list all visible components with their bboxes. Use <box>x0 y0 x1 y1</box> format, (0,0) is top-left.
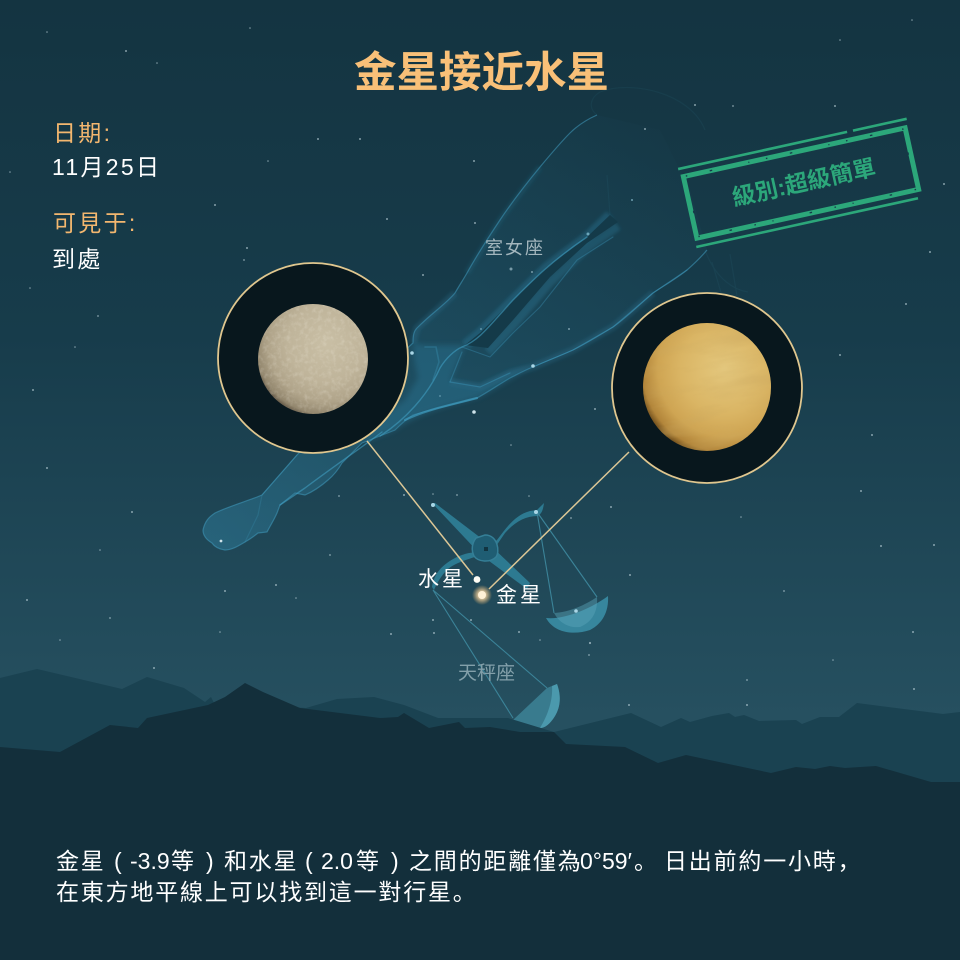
constellation: Libra <box>431 503 608 728</box>
difficulty stamp <box>678 119 924 247</box>
planet point: Venus <box>472 585 492 605</box>
constellation: Virgo <box>203 88 748 550</box>
date value: 11月25日 <box>52 154 161 180</box>
mountain layer: back ridge <box>0 669 960 800</box>
Libra lower pan <box>513 684 560 728</box>
mountain layer: front ridge <box>0 683 960 960</box>
description: 在東方地平線上可以找到這一對行星。 <box>56 879 478 905</box>
Libra beam <box>432 503 530 589</box>
background stars <box>9 19 945 727</box>
Virgo glow bands around limbs <box>413 167 653 387</box>
description: -3.9 <box>130 848 170 874</box>
Libra scale strings <box>433 512 597 718</box>
description: 0°59′ <box>580 848 632 874</box>
inset: Mercury <box>218 263 408 453</box>
label: Virgo: 室女座 <box>485 238 545 258</box>
label: Mercury: 水星 <box>418 568 466 591</box>
description <box>56 848 862 905</box>
Libra upper pan <box>546 596 608 633</box>
description: ) <box>391 848 399 874</box>
date label: 日期: <box>53 120 112 146</box>
connector: Mercury <box>367 441 473 575</box>
label: Libra: 天秤座 <box>458 662 515 684</box>
description: ) <box>206 848 214 874</box>
visibility label: 可見于: <box>53 210 138 236</box>
description: ( <box>114 848 122 874</box>
description: 日出前約一小時， <box>664 848 862 874</box>
label: Venus: 金星 <box>496 584 544 607</box>
description: 金星 <box>56 848 106 874</box>
description: 2.0 <box>321 848 353 874</box>
description: 之間的距離僅為 <box>409 848 583 874</box>
Virgo gap between limbs <box>465 215 618 348</box>
title: 金星接近水星 <box>354 50 609 97</box>
Virgo silhouette <box>203 115 707 550</box>
description: 等 <box>356 848 381 874</box>
stamp text: 級別:超級簡單 <box>730 154 878 211</box>
Virgo bright strands <box>245 237 687 542</box>
Virgo faint head and hair <box>591 88 748 296</box>
description: 等 <box>171 848 196 874</box>
visibility value: 到處 <box>52 246 103 272</box>
description: 。 <box>634 848 657 874</box>
Virgo outline <box>203 115 707 550</box>
planet point: Mercury <box>474 576 480 583</box>
description: 和水星 <box>224 848 298 874</box>
Virgo bright thigh area <box>362 343 533 443</box>
description: ( <box>305 848 313 874</box>
connector: Venus <box>489 452 629 589</box>
Virgo stars <box>410 351 414 355</box>
inset: Venus <box>610 290 804 484</box>
